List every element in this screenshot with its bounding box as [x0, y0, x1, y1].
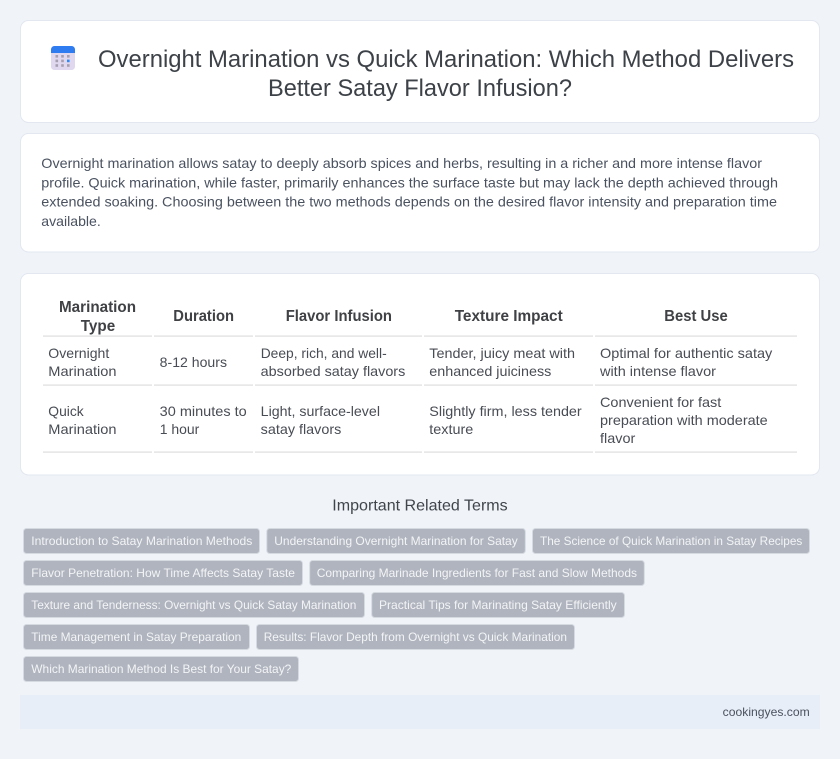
table row: overnight marination: Overnight — [48, 345, 109, 361]
table row: overnight marination: with intense flavor — [599, 363, 716, 379]
related terms tags: Time Management in Satay Preparation — [31, 630, 241, 644]
table row: overnight marination: 8-12 hours — [160, 354, 227, 370]
related terms tags: Practical Tips for Marinating Satay Efficiently — [379, 598, 617, 612]
table row: quick marination: Slightly firm, less tender — [429, 403, 582, 419]
text block: introduction paragraph: available. — [41, 213, 101, 229]
table row: quick marination: Quick — [48, 403, 85, 419]
footer — [20, 695, 820, 729]
title: Overnight Marination vs Quick Marination: Which Method Delivers — [98, 46, 794, 73]
table header: Texture Impact — [455, 308, 563, 325]
panel: title card — [20, 20, 820, 122]
table row: quick marination: flavor — [600, 430, 636, 446]
related terms tags: Understanding Overnight Marination for Satay — [274, 534, 518, 548]
related terms tags: Comparing Marinade Ingredients for Fast and Slow Methods — [317, 566, 637, 580]
table header: Best Use — [664, 308, 728, 325]
table row: quick marination: preparation with moderate — [600, 412, 768, 428]
table header: Flavor Infusion — [286, 308, 392, 325]
table row: quick marination: texture — [429, 421, 474, 437]
related terms tags: Which Marination Method Is Best for Your Satay? — [31, 662, 292, 676]
table row: quick marination: Light, surface-level — [261, 403, 380, 419]
text block: introduction paragraph: extended soaking. Choosing between the two methods depends on the desired flavor intensity and preparation time — [41, 194, 777, 210]
related terms tags: Results: Flavor Depth from Overnight vs Quick Marination — [264, 630, 567, 644]
table header: Marination — [59, 299, 136, 316]
table row: overnight marination: Tender, juicy meat with — [429, 345, 575, 361]
title — [98, 46, 794, 102]
footer: cookingyes.com — [723, 705, 810, 719]
icon: calendar — [51, 46, 75, 70]
table row: overnight marination: absorbed satay flavors — [261, 363, 405, 379]
text block: introduction paragraph: Overnight marination allows satay to deeply absorb spices and herbs, resulting in a richer and more intense flavor — [41, 155, 762, 171]
table header: Duration — [173, 308, 234, 325]
table row: overnight marination: Optimal for authentic satay — [600, 345, 772, 361]
related terms tags: Flavor Penetration: How Time Affects Satay Taste — [31, 566, 295, 580]
heading: important related terms: Important Related Terms — [332, 498, 508, 515]
related terms tags — [24, 528, 810, 682]
related terms tags: Introduction to Satay Marination Methods — [31, 534, 252, 548]
text block: introduction paragraph: profile. Quick marination, while faster, primarily enhances the surface taste but may lack the depth achieved through — [41, 174, 778, 190]
table row: quick marination: Convenient for fast — [600, 394, 721, 410]
title: Better Satay Flavor Infusion? — [268, 75, 572, 102]
text block: introduction paragraph — [41, 155, 778, 229]
related terms tags: The Science of Quick Marination in Satay Recipes — [540, 534, 802, 548]
table row: quick marination: Marination — [48, 421, 116, 437]
table header — [59, 299, 728, 335]
table row: quick marination: 1 hour — [160, 421, 200, 437]
panel: introduction — [20, 134, 820, 252]
table row: overnight marination — [48, 345, 772, 379]
table row: overnight marination: enhanced juiciness — [429, 363, 551, 379]
related terms tags: Texture and Tenderness: Overnight vs Quick Satay Marination — [31, 598, 356, 612]
table row: overnight marination: Deep, rich, and well- — [261, 345, 387, 361]
table row: quick marination: satay flavors — [261, 421, 341, 437]
table row: quick marination — [48, 394, 768, 446]
table header: Type — [81, 318, 115, 335]
panel: comparison table — [20, 274, 820, 475]
table row: quick marination: 30 minutes to — [160, 403, 247, 419]
table row: overnight marination: Marination — [48, 363, 116, 379]
